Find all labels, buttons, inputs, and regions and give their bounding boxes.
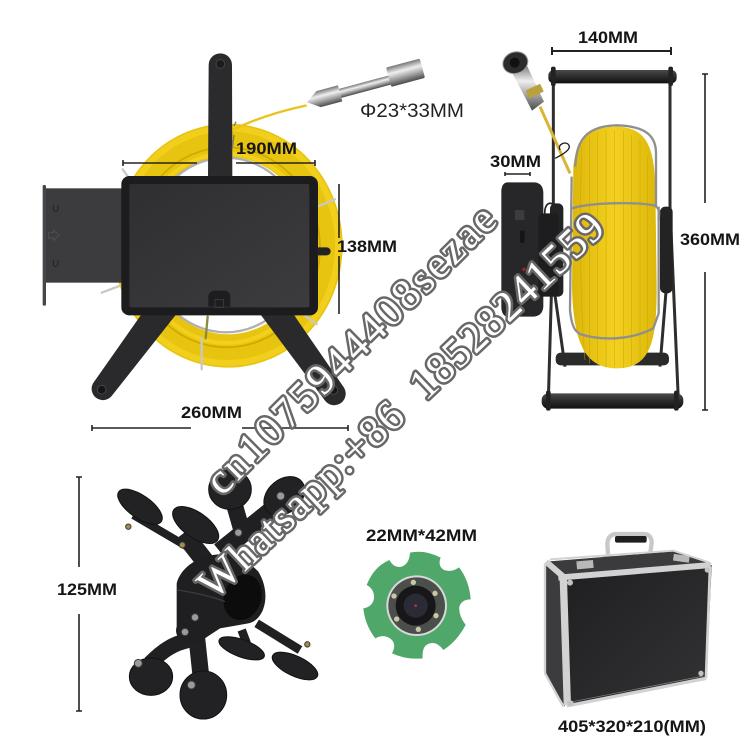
label: monitor depth: 30MM	[490, 153, 541, 171]
label: reel width: 190MM	[236, 140, 297, 158]
left view: reel with monitor	[43, 53, 425, 405]
dimension lines	[76, 47, 708, 711]
camera head and cable	[500, 48, 570, 173]
arms	[133, 507, 300, 683]
green cog	[363, 552, 471, 659]
watermark: email: cn1075944408sezae	[196, 196, 506, 504]
lens ring	[386, 575, 447, 636]
frame rods	[548, 77, 678, 400]
chrome clips	[102, 169, 335, 369]
top arm	[208, 53, 232, 178]
top bar	[548, 67, 677, 86]
label: case size: 405*320*210(MM)	[558, 718, 706, 736]
crawler with magnetic wheels	[112, 469, 322, 719]
case front	[565, 565, 712, 707]
side hubs	[550, 203, 563, 297]
label: camera head size: 22MM*42MM	[366, 527, 477, 545]
bolts	[126, 492, 310, 689]
lower inner bar	[556, 353, 669, 365]
central hub	[176, 554, 268, 643]
label: frame width: 140MM	[578, 29, 638, 47]
aluminium carry case	[545, 534, 712, 707]
lens	[396, 586, 436, 626]
LEDs	[391, 580, 439, 632]
bottom legs	[92, 312, 346, 405]
monitor back	[121, 176, 331, 315]
yellow cable coil	[118, 128, 338, 363]
wheels	[112, 469, 322, 719]
chrome straps	[570, 125, 659, 338]
camera probe	[304, 59, 425, 110]
monitor side	[501, 182, 558, 317]
case left side	[545, 563, 565, 707]
aluminium trim	[545, 551, 711, 707]
label: crawler height: 125MM	[57, 581, 117, 599]
case lid top	[546, 551, 712, 578]
label: stand width: 260MM	[181, 404, 242, 422]
handle	[603, 534, 657, 564]
label: monitor height: 138MM	[337, 238, 397, 256]
green camera head	[363, 552, 471, 659]
label: frame height: 360MM	[680, 231, 740, 249]
latches	[576, 554, 690, 569]
bottom bar	[542, 391, 683, 411]
watermark: whatsapp: Whatsapp:+86 18528241559	[189, 204, 614, 608]
corners	[567, 567, 710, 706]
label: probe size: Φ23*33MM	[360, 101, 464, 122]
yellow cable drum	[572, 127, 657, 368]
slide-out sun visor	[43, 185, 124, 306]
camera cable	[233, 105, 307, 129]
right view: reel on frame	[500, 48, 683, 411]
